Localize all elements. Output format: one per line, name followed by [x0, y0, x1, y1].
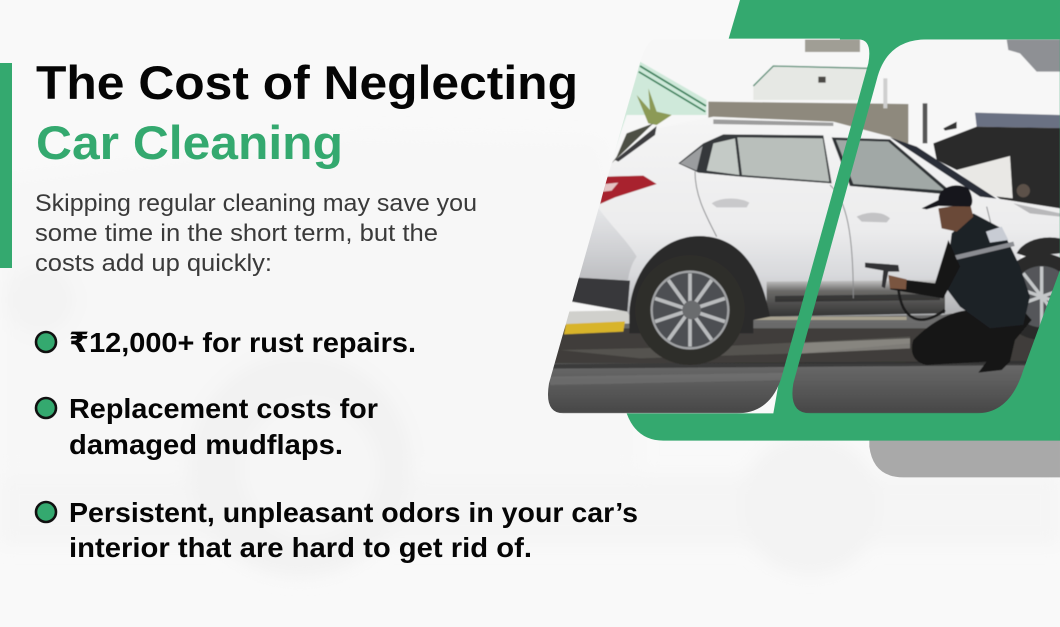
door seams: [695, 172, 993, 298]
wheel arch: [629, 236, 770, 333]
door handles: [712, 198, 749, 207]
intro paragraph: Skipping regular cleaning may save you: [35, 190, 477, 217]
road surface: [540, 310, 1060, 413]
head: [938, 203, 973, 232]
bullet: rust repairs: ₹12,000+ for rust repairs.: [69, 327, 416, 358]
front wheel: [1016, 254, 1060, 340]
bullet: mudflaps: [36, 393, 378, 460]
green striped awning: [618, 62, 707, 142]
bullet: mudflaps: Replacement costs for: [69, 393, 378, 424]
potted plant: [637, 88, 672, 125]
bullet: odors: [36, 497, 638, 563]
intro paragraph: costs add up quickly:: [35, 250, 272, 277]
grey tab: [869, 433, 1060, 477]
tail light: [600, 176, 657, 204]
yellow curb: [564, 321, 625, 334]
rocker panel: [767, 280, 945, 317]
rear quarter shading: [579, 210, 636, 280]
car body: [572, 117, 1060, 333]
photo block with green frame: [540, 0, 1060, 477]
windows: [678, 134, 832, 183]
rear wheel: [640, 270, 740, 365]
building backdrop: [572, 39, 1060, 314]
roof rail: [713, 119, 833, 126]
arm: [890, 240, 960, 298]
hose: [898, 288, 945, 320]
vest: [945, 213, 1030, 328]
intro paragraph: [35, 190, 477, 277]
bullet: mudflaps: damaged mudflaps.: [69, 429, 343, 460]
left accent bar: [0, 63, 12, 268]
cap: [922, 185, 972, 209]
spray gun: [865, 263, 899, 288]
bullet: odors: Persistent, unpleasant odors in your car’s: [69, 497, 638, 528]
bullet: odors: interior that are hard to get rid of.: [69, 532, 532, 563]
lower bumper: [572, 277, 630, 312]
photo: car wash technician: [540, 33, 1060, 413]
title: [36, 56, 578, 169]
legs: [912, 307, 1032, 373]
mirror and rear glass: [615, 126, 657, 162]
intro paragraph: some time in the short term, but the: [35, 220, 438, 247]
technician: [865, 185, 1032, 373]
green frame: [627, 0, 1060, 441]
title: The Cost of Neglecting: [36, 56, 578, 109]
title: Car Cleaning: [36, 116, 343, 169]
bullet list: [36, 327, 638, 563]
front wheel arch: [1017, 237, 1060, 257]
